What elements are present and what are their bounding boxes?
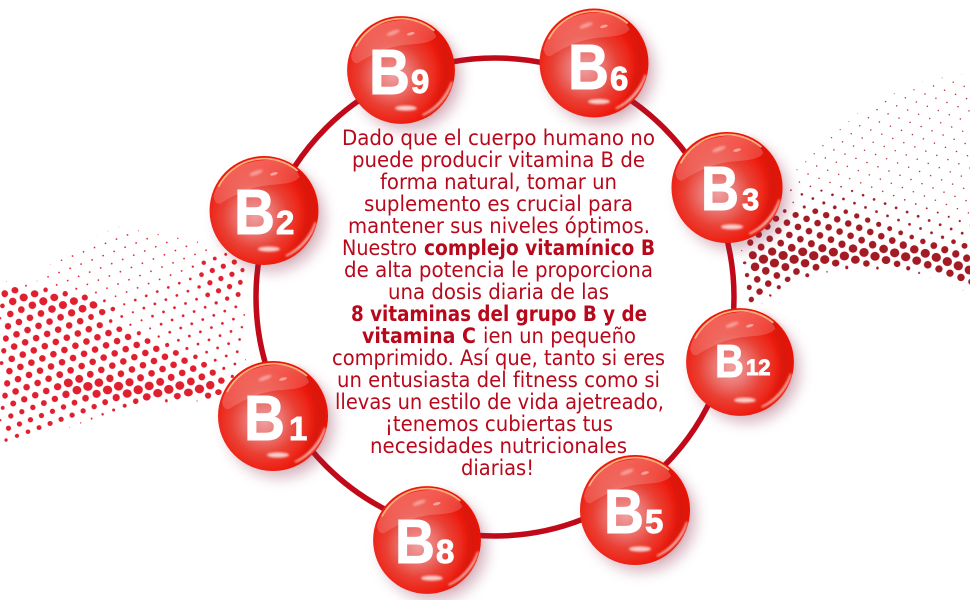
ball B5: B: [604, 478, 644, 547]
ball B2: B: [234, 176, 275, 248]
ball B6: 6: [610, 60, 628, 97]
ball B12: B: [715, 335, 744, 387]
central text block: suplemento es crucial para: [364, 192, 633, 216]
central text block: un entusiasta del fitness como si: [337, 368, 660, 392]
ball B8: B: [395, 508, 435, 577]
ball B1: 1: [289, 410, 307, 447]
ball B6: B: [568, 31, 609, 103]
ball B3: B: [701, 155, 739, 224]
ball B9: B: [369, 36, 410, 108]
central text block: Nuestro: [342, 236, 417, 260]
ball B5: 5: [645, 503, 663, 540]
central text block: Dado que el cuerpo humano no: [342, 126, 655, 150]
central text block: vitamina C: [362, 324, 476, 348]
central text block: mantener sus niveles óptimos.: [348, 214, 650, 238]
central text block: una dosis diaria de las: [388, 280, 609, 304]
central text block: forma natural, tomar un: [380, 170, 617, 194]
ball B1: B: [244, 382, 285, 454]
ball B6: [540, 9, 654, 124]
ball B9: [347, 16, 461, 131]
central text block: necesidades nutricionales: [370, 434, 627, 458]
ball B9: 9: [411, 63, 429, 100]
ball B12: 12: [746, 355, 770, 380]
central text block: [332, 126, 665, 480]
ball B2: [210, 156, 324, 272]
central text block: comprimido. Así que, tanto si eres: [332, 346, 665, 370]
central text block: puede producir vitamina B de: [352, 148, 645, 172]
central text block: ien un pequeño: [483, 324, 636, 348]
ball B8: [373, 486, 487, 600]
ball B5: [580, 455, 696, 572]
central text block: complejo vitamínico B: [424, 236, 655, 260]
ball B12: [686, 308, 800, 423]
central text block: de alta potencia le proporciona: [344, 258, 653, 282]
central text block: ¡tenemos cubiertas tus: [385, 412, 613, 436]
central text block: llevas un estilo de vida ajetreado,: [335, 390, 664, 414]
connecting ring: [256, 58, 734, 536]
ball B8: 8: [436, 533, 454, 570]
central text block: diarias!: [461, 456, 534, 480]
central text block: 8 vitaminas del grupo B y de: [351, 302, 647, 326]
halftone wave left: [0, 205, 246, 455]
ball B1: [218, 361, 334, 478]
halftone wave right: [738, 60, 970, 322]
ball B3: 3: [742, 182, 759, 217]
ball B3: [671, 132, 789, 250]
ball B2: 2: [276, 204, 294, 241]
